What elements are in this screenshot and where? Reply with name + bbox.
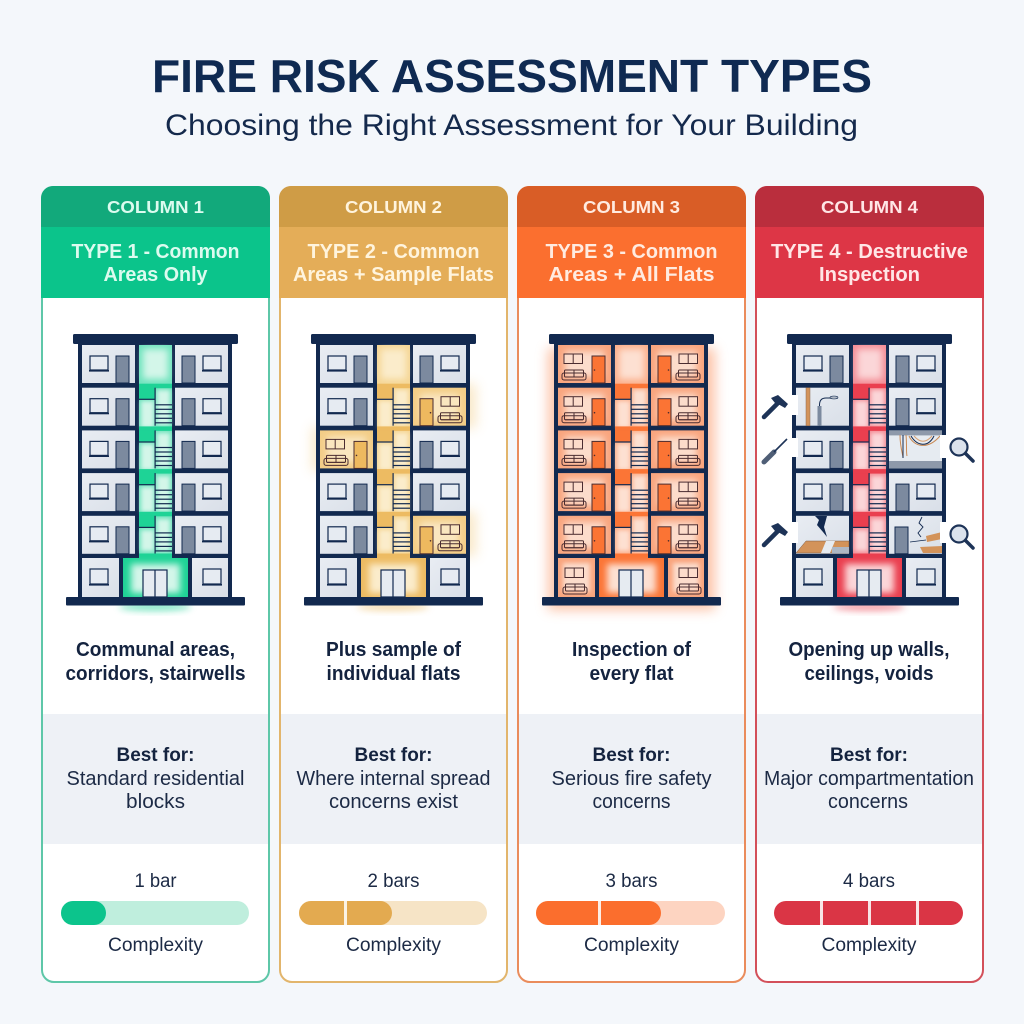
card frame <box>42 187 269 982</box>
best for text <box>764 744 974 813</box>
best for text: Best for: <box>354 744 432 766</box>
description: every flat <box>590 662 674 685</box>
panel: column 2 <box>279 186 508 982</box>
complexity meter: 2 bars <box>299 871 487 956</box>
header: column label <box>41 186 270 227</box>
header: column label <box>755 186 984 227</box>
best for text: Major compartmentation <box>764 768 974 790</box>
best for text: Where internal spread <box>296 768 490 790</box>
complexity meter: 4 bars <box>774 871 963 956</box>
complexity meter: 3 bars: 3 bars <box>606 871 658 892</box>
header: column label <box>517 186 746 227</box>
card frame <box>756 187 983 982</box>
best for text: Best for: <box>830 744 908 766</box>
best for text <box>296 744 490 813</box>
best for text: concerns <box>592 791 670 813</box>
complexity meter: 1 bar: Complexity <box>108 935 203 956</box>
description: corridors, stairwells <box>66 662 246 685</box>
best for text: concerns exist <box>329 791 458 813</box>
complexity meter: 2 bars: Complexity <box>346 935 441 956</box>
complexity meter: 2 bars: 2 bars <box>368 871 420 892</box>
header: type name <box>755 227 984 298</box>
header: column label <box>279 186 508 227</box>
opened cell: cracked wall and floor left <box>796 516 849 554</box>
best for text: blocks <box>126 791 185 813</box>
band: best for background <box>757 714 982 844</box>
description: Inspection of <box>572 638 691 661</box>
header: type name <box>517 227 746 298</box>
header: column label: COLUMN 2 <box>345 197 442 217</box>
opened cell: cracked wall and floor right <box>889 516 942 554</box>
header: type name: Areas + Sample Flats <box>293 264 494 286</box>
header: type name <box>41 227 270 298</box>
complexity meter: 3 bars <box>536 871 725 956</box>
building: sample flats highlighted <box>304 334 483 611</box>
header: type name: TYPE 1 - Common <box>72 241 240 263</box>
best for text <box>66 744 244 813</box>
icon: magnifier upper <box>950 438 973 461</box>
card frame <box>280 187 507 982</box>
description: Opening up walls, <box>788 638 950 661</box>
wall gaps <box>790 395 948 543</box>
card frame <box>518 187 745 982</box>
band: best for background <box>43 714 268 844</box>
complexity meter: 3 bars: Complexity <box>584 935 679 956</box>
complexity meter: 4 bars: Complexity <box>822 935 917 956</box>
subtitle: Choosing the Right Assessment for Your Building <box>165 109 858 142</box>
band: best for background <box>281 714 506 844</box>
description: Plus sample of <box>326 638 461 661</box>
complexity meter: 1 bar <box>61 871 249 956</box>
band: best for background <box>519 714 744 844</box>
header: column label: COLUMN 4 <box>821 197 918 217</box>
opened cell: pipe and lamp <box>796 388 849 426</box>
building: all flats highlighted <box>542 334 721 610</box>
header: column label: COLUMN 3 <box>583 197 680 217</box>
complexity meter: 1 bar: 1 bar <box>134 871 177 892</box>
header: type name: TYPE 4 - Destructive <box>771 241 968 263</box>
best for text: concerns <box>828 791 908 813</box>
panel: column 3 <box>517 186 746 982</box>
description <box>326 638 461 685</box>
description: Communal areas, <box>76 638 235 661</box>
header: type name: TYPE 2 - Common <box>308 241 480 263</box>
best for text <box>552 744 712 813</box>
panel: column 1 <box>41 186 270 982</box>
complexity meter: 4 bars: 4 bars <box>843 871 895 892</box>
header: type name: Areas + All Flats <box>548 264 714 286</box>
description <box>788 638 950 685</box>
icon: screwdriver <box>764 439 787 462</box>
header: type name <box>279 227 508 298</box>
header: type name: Areas Only <box>104 264 208 286</box>
description <box>572 638 691 685</box>
best for text: Best for: <box>592 744 670 766</box>
building: opened-up walls <box>764 334 973 611</box>
description: ceilings, voids <box>804 662 934 685</box>
opened cell: exposed wiring <box>889 430 942 468</box>
description <box>66 638 246 685</box>
description: individual flats <box>326 662 460 685</box>
icon: hammer upper <box>764 395 788 417</box>
best for text: Best for: <box>116 744 194 766</box>
best for text: Serious fire safety <box>552 768 712 790</box>
building: common areas highlighted <box>66 334 245 611</box>
header: column label: COLUMN 1 <box>107 197 204 217</box>
panel: column 4 <box>755 186 984 982</box>
title: FIRE RISK ASSESSMENT TYPES <box>152 50 872 102</box>
icon: hammer lower <box>764 523 788 545</box>
icon: magnifier lower <box>950 526 973 548</box>
header: type name: TYPE 3 - Common <box>546 241 718 263</box>
best for text: Standard residential <box>66 768 244 790</box>
header: type name: Inspection <box>819 264 920 286</box>
